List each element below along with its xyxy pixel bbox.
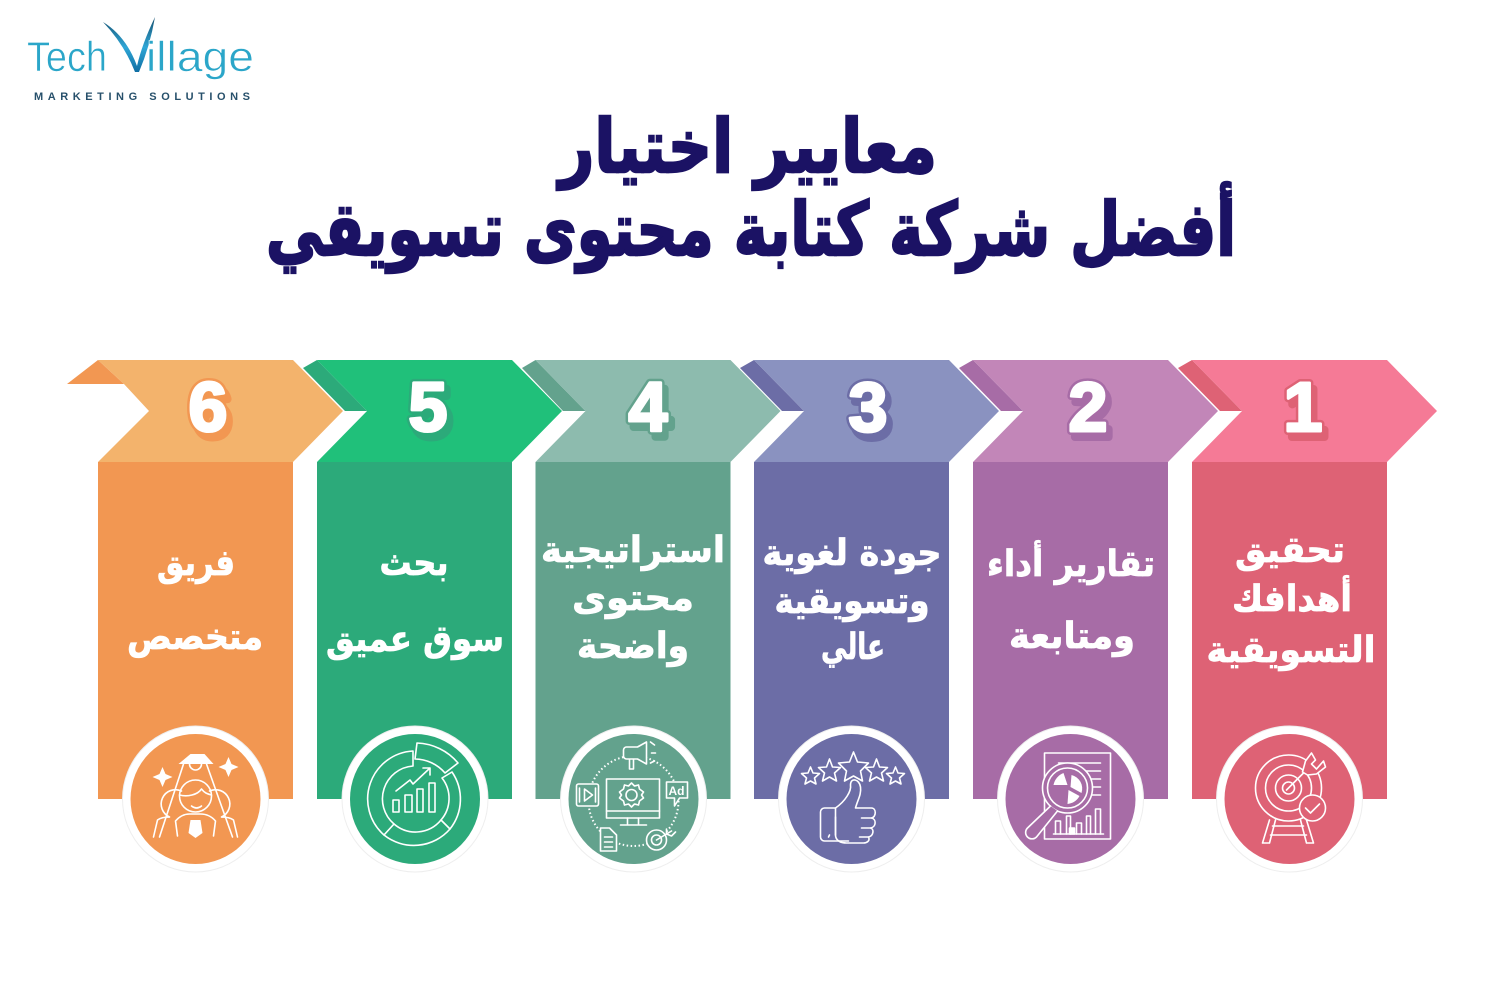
number 5: 5	[409, 368, 447, 446]
text: step 4: محتوى	[572, 578, 694, 619]
number 5: 5	[413, 374, 451, 452]
text: step 3: عالي	[821, 627, 885, 668]
icon: stars and thumbs up	[778, 726, 924, 872]
number 1: 1	[1284, 368, 1322, 446]
number 6: 6	[189, 368, 227, 446]
text: step 4: استراتيجية	[541, 530, 725, 571]
number 3: 3	[853, 374, 891, 452]
number 1: 1	[1288, 374, 1326, 452]
panel: step 2	[959, 360, 1218, 872]
icon: target with check	[1216, 726, 1362, 872]
icon: report with magnifier	[998, 726, 1144, 872]
panel: step 1	[1178, 360, 1437, 872]
text: step 2: تقارير أداء	[987, 540, 1155, 585]
number 4: 4	[633, 374, 672, 452]
number 4: 4	[629, 368, 668, 446]
text: step 1: تحقيق	[1235, 530, 1345, 571]
icon: team under spotlight	[122, 726, 268, 872]
number 2: 2	[1069, 368, 1107, 446]
text: step 2	[987, 540, 1155, 657]
number 2: 2	[1069, 368, 1107, 446]
icon: donut chart with bars	[342, 726, 488, 872]
title: أفضل شركة كتابة محتوى تسويقي	[266, 181, 1236, 274]
icon: content strategy cycle	[560, 726, 706, 872]
number 4: 4	[629, 368, 668, 446]
text: step 5	[326, 543, 504, 660]
title	[266, 104, 1236, 274]
text: step 4: واضحة	[577, 626, 689, 667]
panel: step 6	[67, 360, 343, 872]
logo: TechVillage: MARKETING SOLUTIONS	[34, 91, 250, 103]
text: step 4	[541, 530, 725, 667]
number 3: 3	[849, 368, 887, 446]
number 5: 5	[409, 368, 447, 446]
text: step 5: بحث	[380, 543, 448, 584]
number 2: 2	[1073, 374, 1111, 452]
text: step 6: متخصص	[127, 617, 263, 658]
number 6: 6	[189, 368, 227, 446]
logo: TechVillage: Tech	[27, 33, 107, 80]
logo: TechVillage	[27, 17, 254, 103]
text: step 6	[127, 543, 263, 658]
panel: step 3	[740, 360, 999, 872]
text: step 2: ومتابعة	[1009, 616, 1135, 657]
number 6: 6	[193, 374, 231, 452]
text: step 6: فريق	[157, 543, 235, 584]
number 3: 3	[849, 368, 887, 446]
panel: step 5	[303, 360, 562, 872]
title: معايير اختيار	[556, 104, 937, 190]
panel: step 4	[522, 360, 780, 872]
text: step 3: وتسويقية	[774, 581, 930, 622]
text: step 5: سوق عميق	[326, 619, 504, 660]
text: step 1: أهدافك	[1232, 575, 1352, 620]
icon: content strategy cycle: Ad	[668, 784, 684, 798]
text: step 1	[1206, 530, 1376, 671]
text: step 1: التسويقية	[1206, 630, 1376, 671]
number 1: 1	[1284, 368, 1322, 446]
text: step 3: جودة لغوية	[762, 533, 942, 574]
text: step 3	[762, 533, 942, 668]
logo: TechVillage: illage	[146, 33, 254, 80]
